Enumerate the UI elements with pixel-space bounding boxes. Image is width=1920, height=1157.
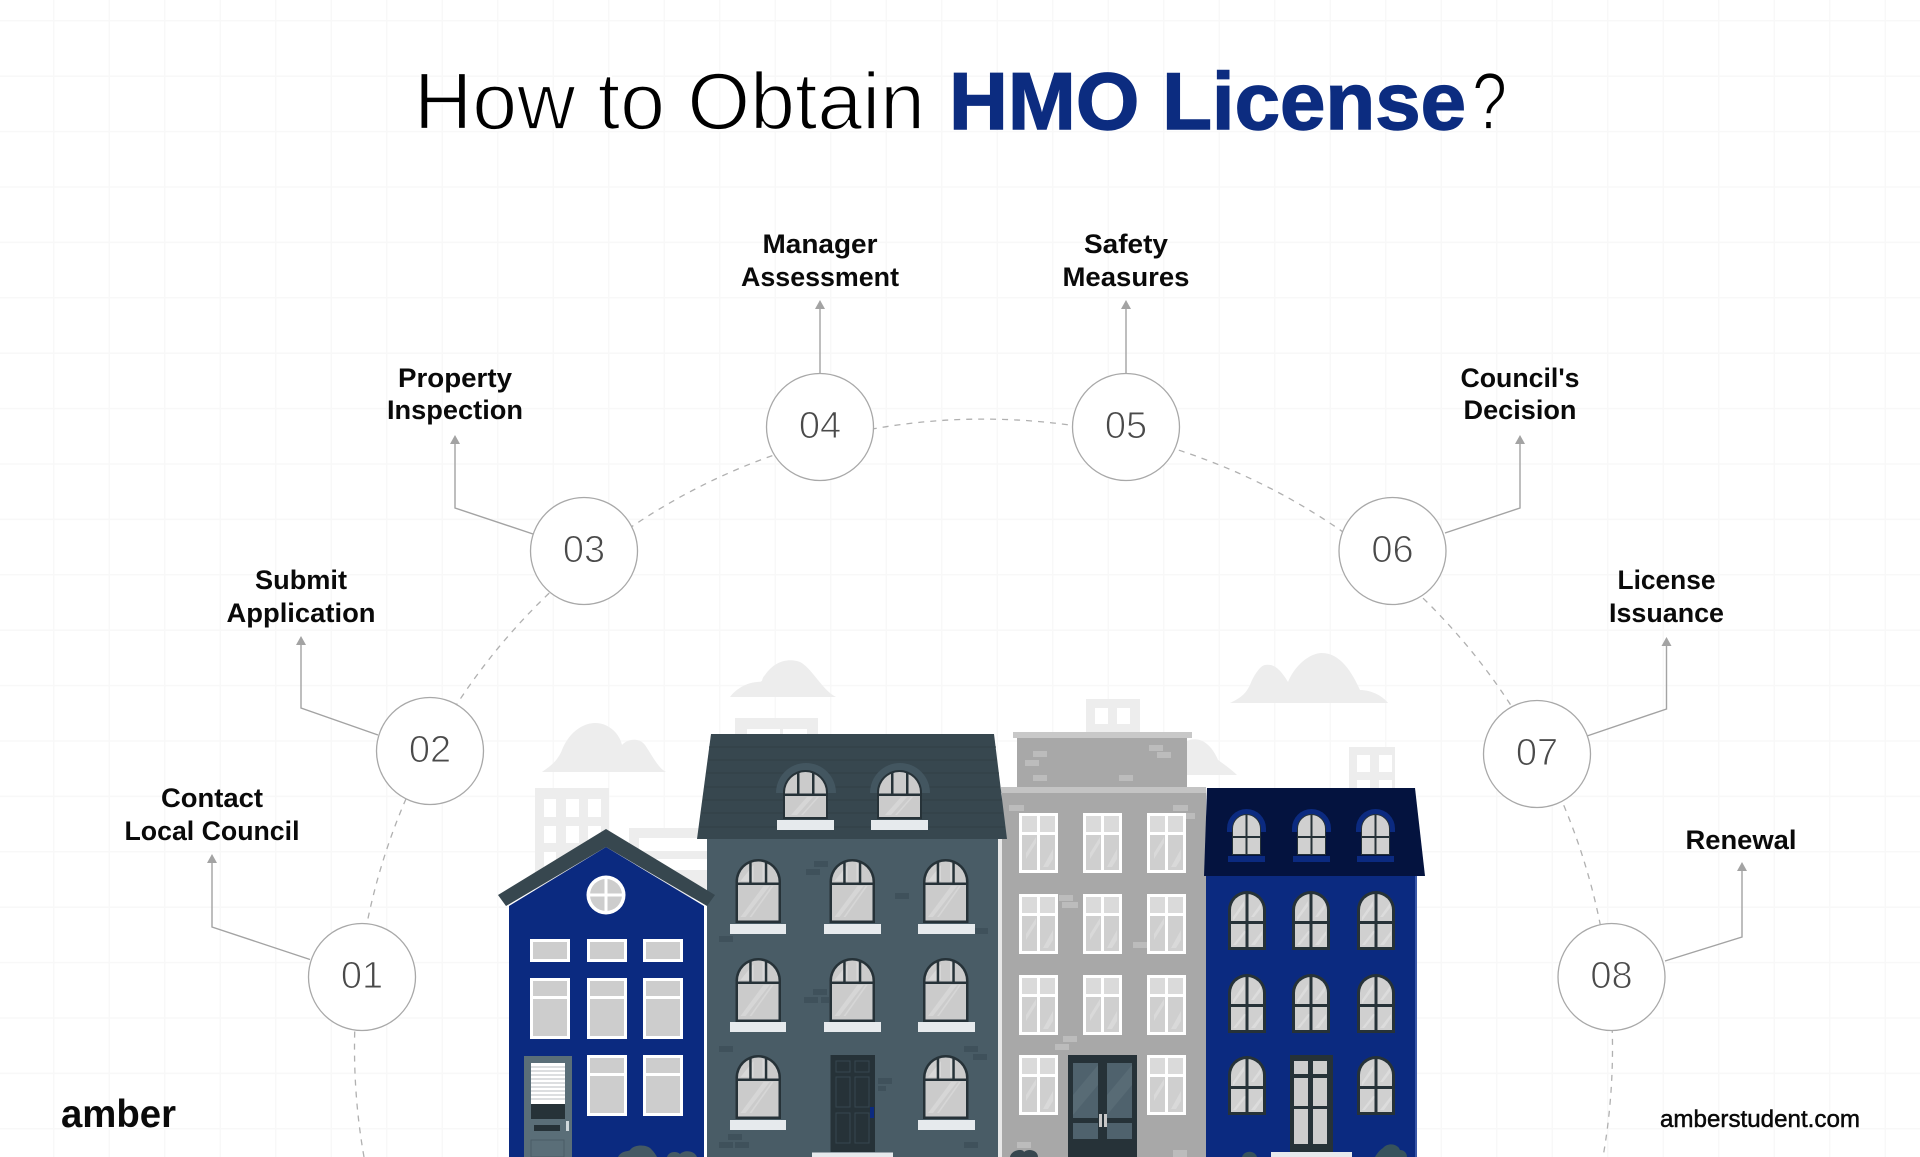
step 04: 04 (799, 405, 841, 447)
building: gabled blue house (498, 829, 715, 1157)
background skyline: clouds and pale buildings (535, 653, 1395, 898)
step 01: Local Council (124, 816, 300, 846)
step 08: Renewal (1686, 825, 1796, 855)
step 02: Submit (255, 565, 347, 595)
title: HMO License (949, 57, 1466, 147)
round window (586, 876, 626, 914)
glazed door (1290, 1055, 1333, 1152)
door with blinds (524, 1056, 572, 1157)
title: ? (1472, 57, 1507, 147)
step 03: Property (398, 363, 512, 393)
website url: amberstudent.com (1660, 1106, 1860, 1133)
step 06: Council's (1460, 363, 1580, 393)
building: navy mansard house (1204, 788, 1425, 1157)
mansard roof (697, 734, 1007, 839)
step 01: Contact (161, 783, 263, 813)
step 07 (1484, 565, 1724, 808)
step 01: 01 (341, 955, 383, 997)
double door (1068, 1055, 1137, 1157)
title: How to Obtain (414, 57, 925, 147)
step 05: Measures (1062, 262, 1190, 292)
dashed arc connecting the steps (355, 419, 1613, 1157)
step 06: Decision (1464, 395, 1576, 425)
step 02: 02 (409, 729, 451, 771)
step 02 (226, 565, 484, 804)
step 05: 05 (1105, 405, 1147, 447)
step 04 (741, 229, 899, 480)
building: slate-grey house (697, 734, 1007, 1157)
step 08 (1558, 825, 1796, 1030)
step 08: 08 (1590, 955, 1633, 997)
step 04: Manager (762, 229, 878, 259)
panelled door (830, 1055, 875, 1152)
step 03: Inspection (387, 395, 523, 425)
step 06: 06 (1371, 529, 1414, 571)
step 06 (1339, 363, 1580, 604)
step 03: 03 (563, 529, 605, 571)
step 07: License (1618, 565, 1716, 595)
step 02: Application (226, 598, 376, 628)
step 07: Issuance (1609, 598, 1724, 628)
step 01 (124, 783, 416, 1030)
step 04: Assessment (741, 262, 899, 292)
step 05 (1062, 229, 1190, 480)
step 07: 07 (1516, 732, 1558, 774)
title (414, 57, 1507, 147)
step 05: Safety (1084, 229, 1168, 259)
building: grey terrace (1000, 732, 1206, 1157)
logo: amber: amber (61, 1093, 176, 1136)
step 03 (387, 363, 638, 604)
